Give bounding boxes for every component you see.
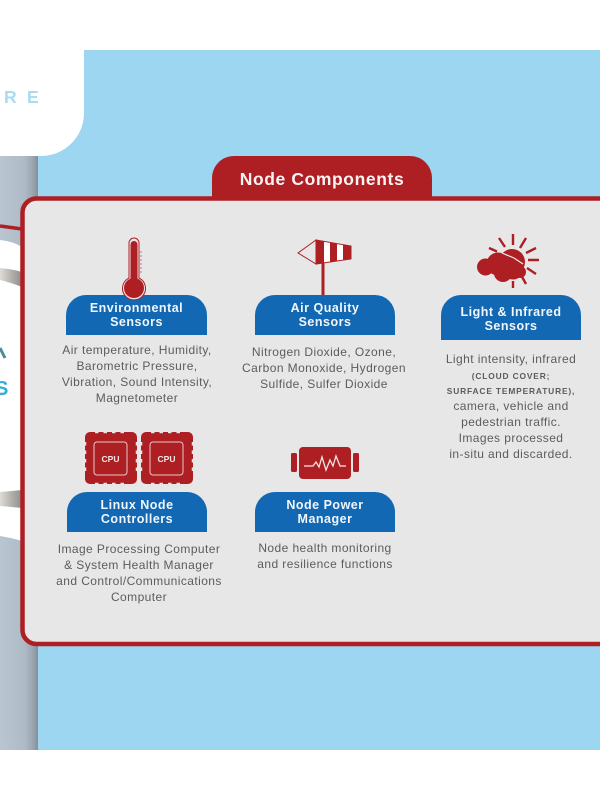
- lower metal band: [0, 490, 22, 508]
- text: light and infrared description: SURFACE TEMPERATURE),: [447, 386, 575, 396]
- text: light and infrared description: Images processed: [459, 431, 563, 445]
- text: environmental sensors description: Barometric Pressure,: [76, 359, 198, 373]
- text: air quality sensors description: Sulfide, Sulfer Dioxide: [260, 377, 388, 391]
- text: node power manager description: Node health monitoring: [258, 541, 392, 555]
- text: linux node controllers description: & System Health Manager: [64, 558, 214, 572]
- icon: CPU chip left: CPU: [102, 454, 119, 464]
- header: Light and Infrared Sensors: Light & Infrared: [460, 305, 562, 319]
- text: node power manager description: and resilience functions: [257, 557, 393, 571]
- header: Node Power Manager: Node Power: [286, 498, 364, 512]
- icon: windsock: [298, 240, 351, 295]
- header: Linux Node Controllers: [67, 492, 207, 532]
- title fragment: R: [4, 87, 17, 107]
- header: Environmental Sensors: [66, 295, 207, 335]
- panel: node components: [22, 198, 600, 644]
- text: environmental sensors description: Air temperature, Humidity,: [62, 343, 212, 357]
- text: environmental sensors description: Vibration, Sound Intensity,: [62, 375, 212, 389]
- text: linux node controllers description: Image Processing Computer: [58, 542, 220, 556]
- header: Light and Infrared Sensors: Sensors: [485, 319, 537, 333]
- gray column on the left: [0, 155, 38, 750]
- text: light and infrared description: [446, 352, 576, 461]
- icon: CPU chip right: CPU: [158, 454, 175, 464]
- header: Linux Node Controllers: Linux Node: [100, 498, 174, 512]
- text: environmental sensors description: Magnetometer: [96, 391, 178, 405]
- text: light and infrared description: (CLOUD COVER;: [472, 371, 550, 381]
- header: Air Quality Sensors: Air Quality: [291, 301, 359, 315]
- teal arc fragment: [0, 348, 5, 358]
- header: Node Power Manager: [255, 492, 395, 532]
- text: linux node controllers description: Computer: [111, 590, 167, 604]
- icon: thermometer: [122, 238, 146, 300]
- text: linux node controllers description: [56, 542, 222, 604]
- upper metal band: [0, 268, 22, 287]
- header: Linux Node Controllers: Controllers: [101, 512, 173, 526]
- header: Air Quality Sensors: [255, 295, 395, 335]
- header: Environmental Sensors: Environmental: [90, 301, 183, 315]
- title fragment: E: [27, 87, 39, 107]
- text: light and infrared description: Light intensity, infrared: [446, 352, 576, 366]
- heading tab: Node Components: Node Components: [240, 169, 404, 189]
- heading tab: Node Components: [212, 156, 432, 198]
- text: air quality sensors description: Nitrogen Dioxide, Ozone,: [252, 345, 396, 359]
- red connector line: [0, 226, 22, 229]
- text: light and infrared description: in-situ and discarded.: [449, 447, 573, 461]
- icon: sun and cloud: [477, 234, 539, 288]
- text: light and infrared description: pedestrian traffic.: [461, 415, 561, 429]
- text: environmental sensors description: [62, 343, 212, 405]
- text: air quality sensors description: Carbon Monoxide, Hydrogen: [242, 361, 406, 375]
- cropped white diagram behind the panel: [0, 226, 22, 541]
- header: Light and Infrared Sensors: [441, 295, 581, 340]
- icon: CPU chip right: [141, 432, 193, 484]
- text: light and infrared description: camera, vehicle and: [453, 399, 569, 413]
- text: air quality sensors description: [242, 345, 406, 391]
- text: node power manager description: [257, 541, 393, 571]
- header: Node Power Manager: Manager: [298, 512, 352, 526]
- white title card, cropped: [0, 50, 84, 156]
- header: Air Quality Sensors: Sensors: [299, 315, 351, 329]
- icon: CPU chip left: [85, 432, 137, 484]
- icon: power manager: [291, 447, 359, 479]
- text: linux node controllers description: and Control/Communications: [56, 574, 222, 588]
- header: Environmental Sensors: Sensors: [110, 315, 163, 329]
